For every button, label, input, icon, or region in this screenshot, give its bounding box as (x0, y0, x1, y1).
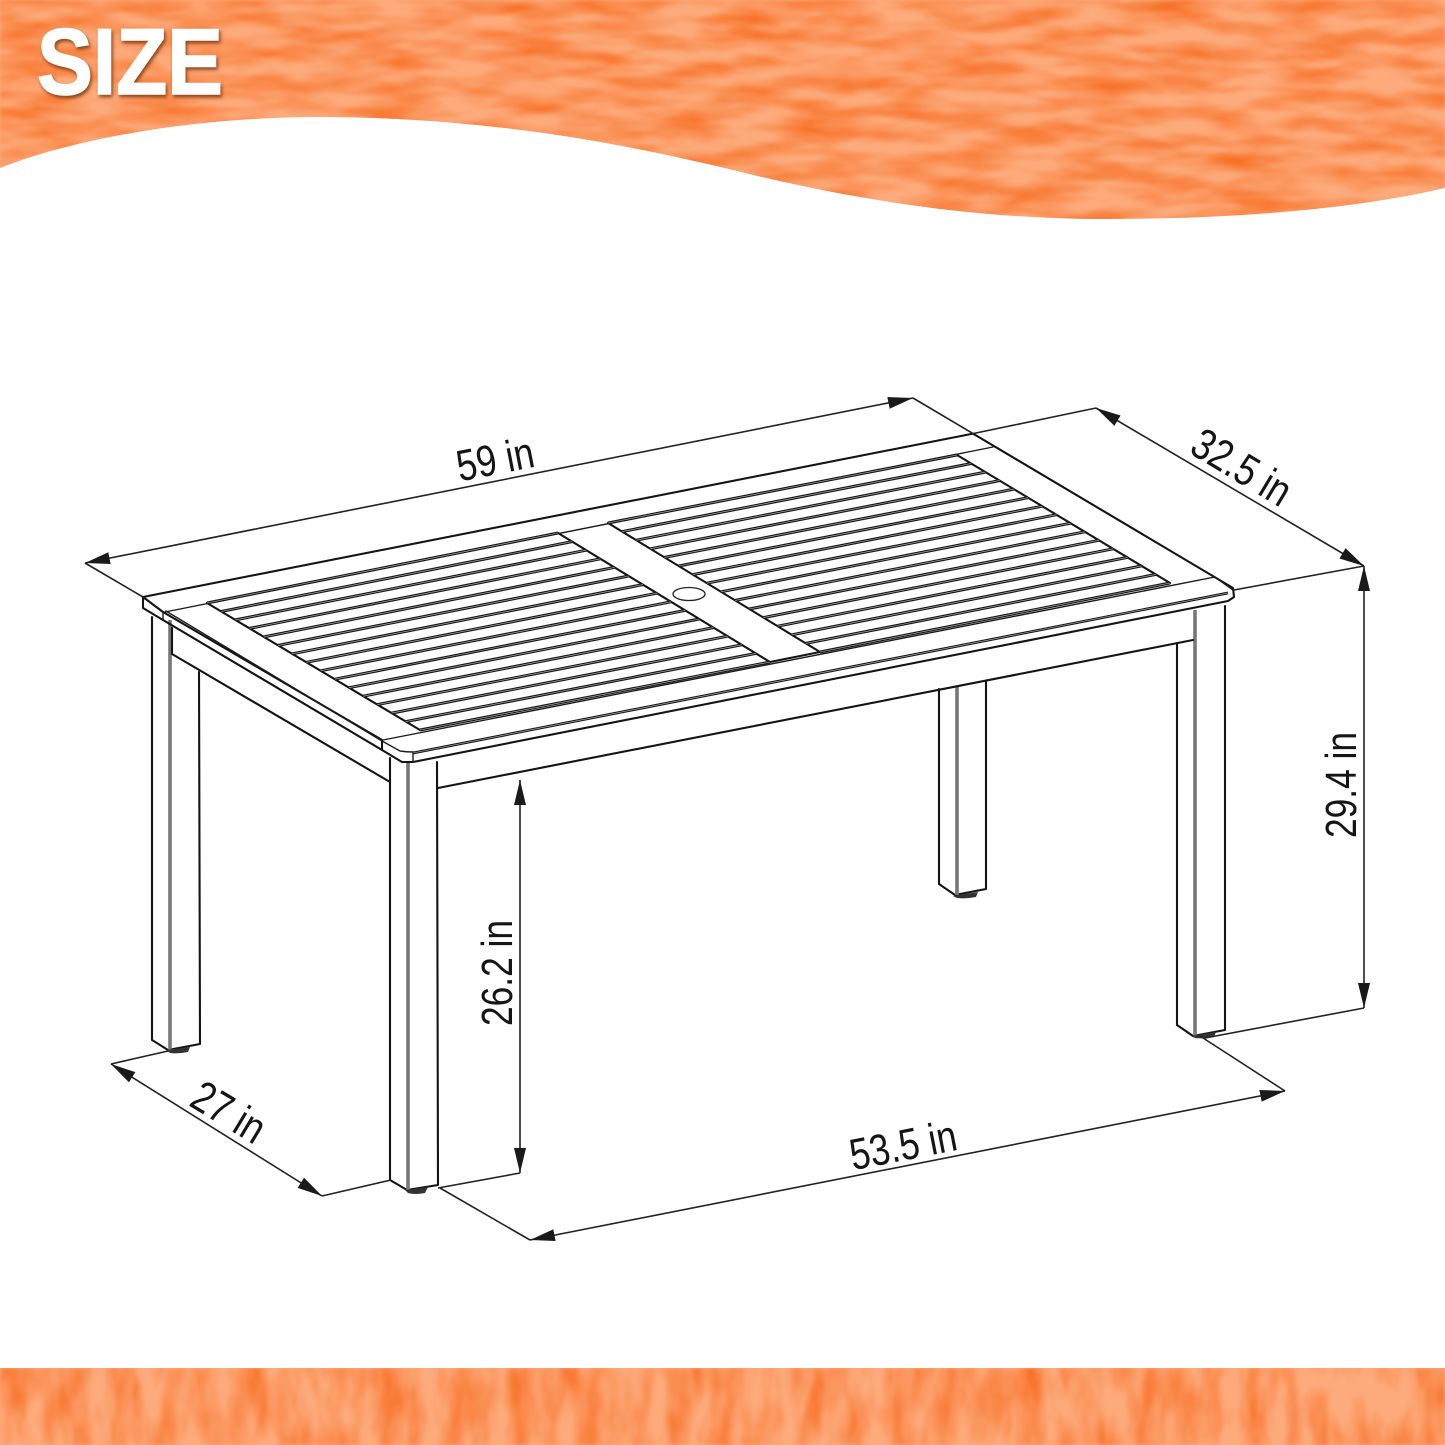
dimension: 59 in length: 59 in (452, 428, 538, 491)
center cross bar and panel edges (207, 455, 1170, 730)
umbrella hole (673, 588, 705, 600)
dimension: 29.4 in height (1205, 566, 1366, 1038)
left leg (152, 617, 200, 1053)
bottom wood band (0, 1368, 1445, 1445)
slats: right panel (608, 455, 1170, 652)
dimension: 29.4 in height: 29.4 in (1317, 732, 1366, 838)
back leg (939, 681, 986, 898)
dimension: 26.2 in clearance (438, 780, 522, 1188)
side apron (172, 628, 390, 782)
right leg (1177, 606, 1225, 1038)
dimension: 27 in leg depth (111, 1051, 391, 1196)
dimension: 26.2 in clearance: 26.2 in (473, 920, 522, 1026)
top wood banner with wave edge (0, 0, 1445, 230)
tabletop outline (143, 434, 1234, 762)
dimension: 53.5 in leg span (440, 1036, 1285, 1240)
title: SIZE (37, 9, 223, 114)
table line drawing (143, 434, 1234, 1194)
dimension: 32.5 in width (973, 408, 1364, 590)
dimension: 32.5 in width: 32.5 in (1183, 419, 1300, 516)
slats: left panel (207, 533, 770, 730)
dimension: 27 in leg depth: 27 in (182, 1071, 275, 1154)
dimension: 59 in length (85, 398, 973, 597)
dimension: 53.5 in leg span: 53.5 in (846, 1111, 961, 1180)
front apron (438, 640, 1193, 788)
front leg (390, 758, 438, 1194)
